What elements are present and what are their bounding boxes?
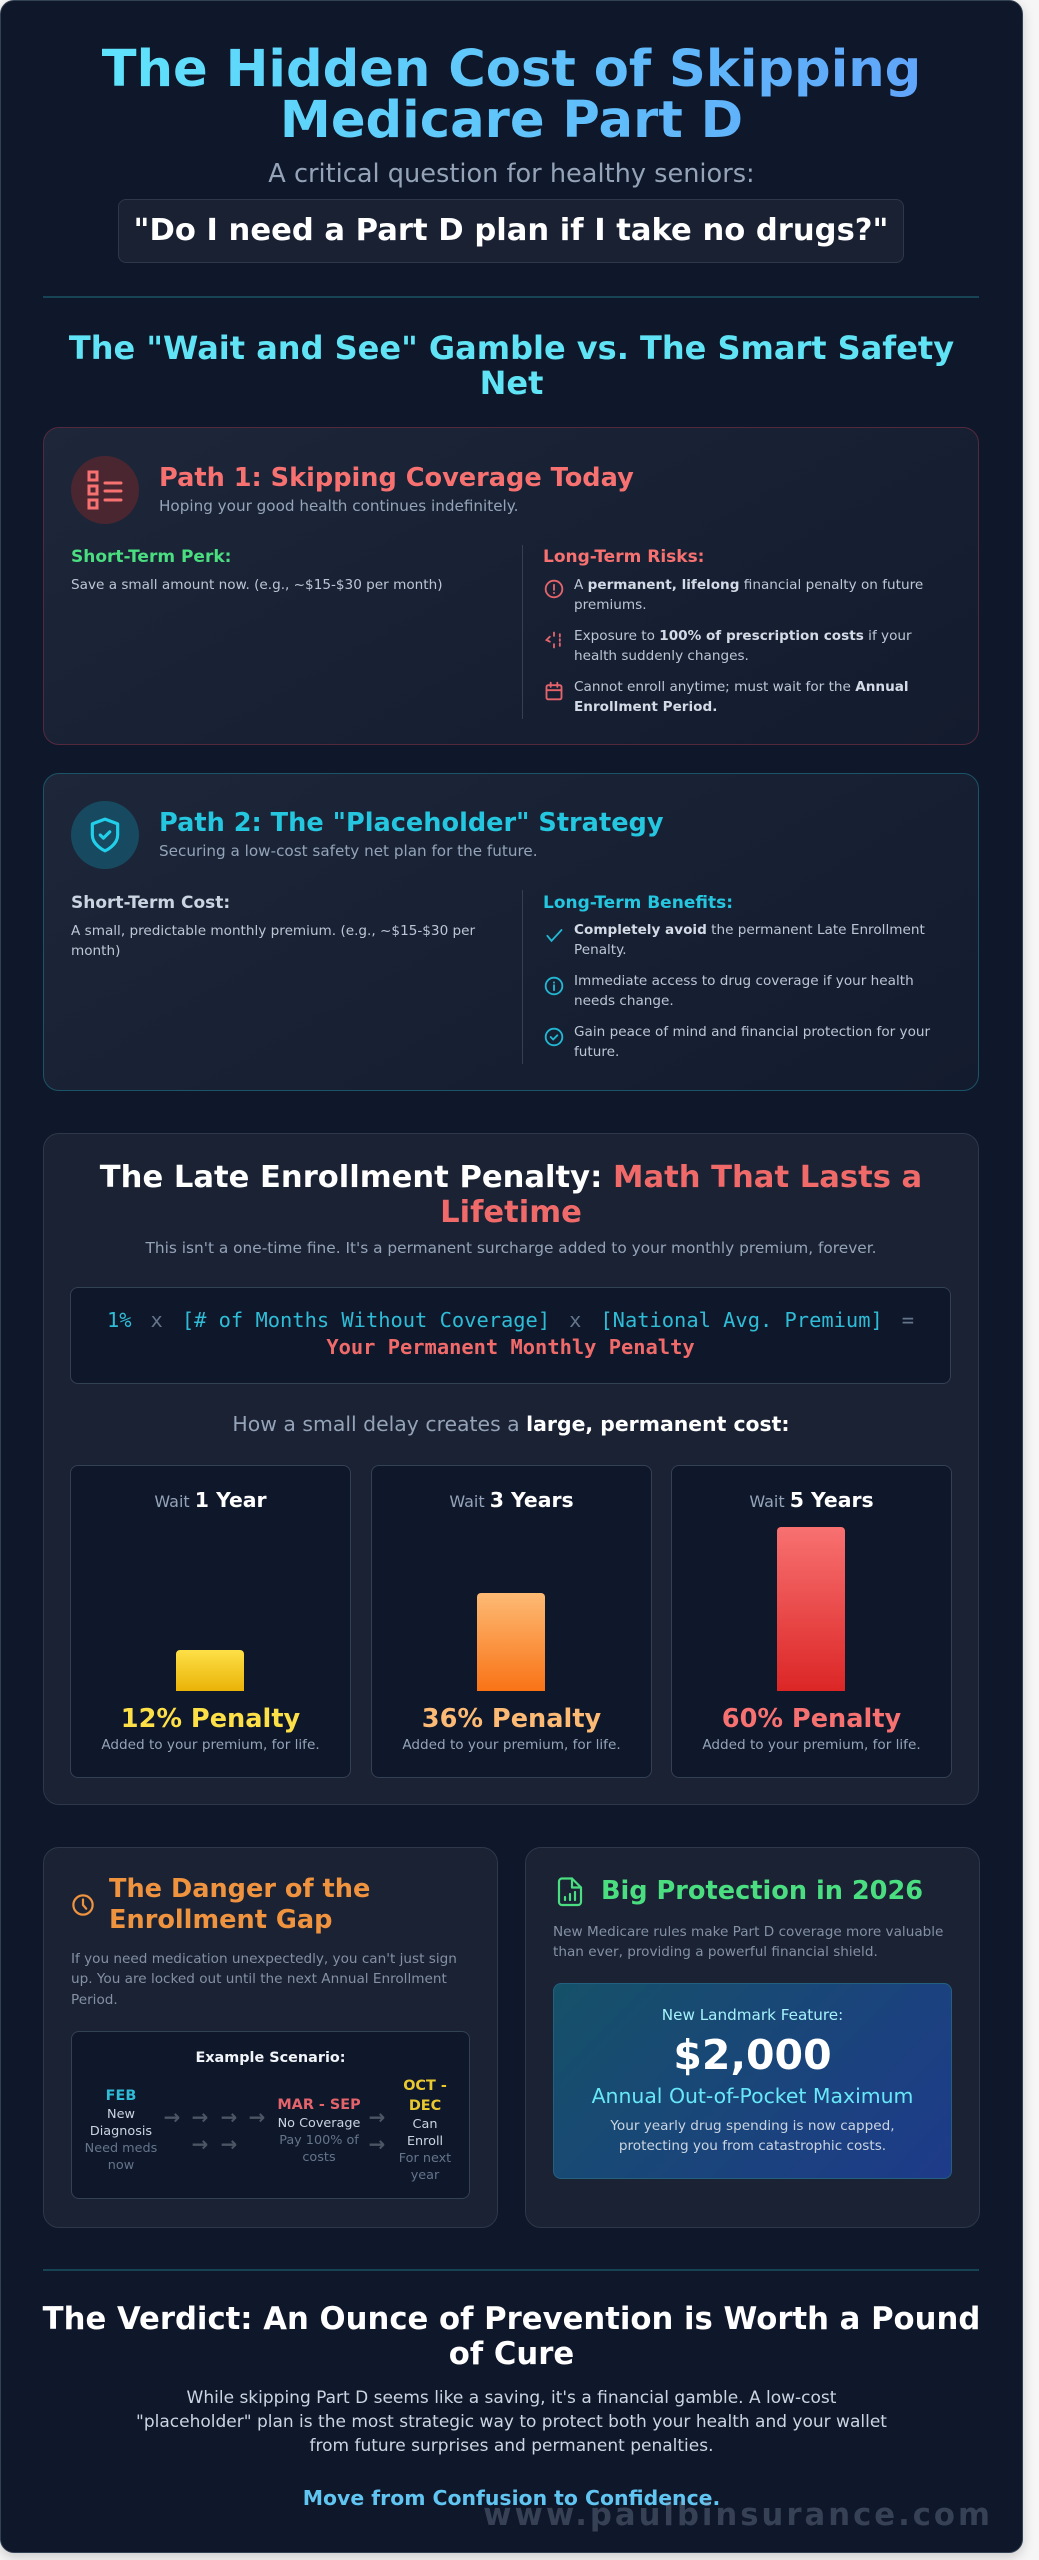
question callout: "Do I need a Part D plan if I take no drugs?" (134, 213, 888, 248)
panel: path 1 (43, 427, 979, 745)
icon: info circle (544, 976, 564, 996)
arrows to march (164, 2105, 265, 2156)
icon: calendar (546, 682, 562, 700)
formula box (70, 1287, 951, 1384)
step: october to december: Enroll (407, 2134, 443, 2149)
icon: shield check (71, 801, 139, 869)
verdict text (136, 2388, 887, 2456)
title: The Hidden Cost of Skipping (102, 39, 921, 99)
arrows to march: → (192, 2132, 208, 2156)
section heading: The "Wait and See" Gamble vs. The Smart Safety (69, 329, 954, 367)
formula: Your Permanent Monthly Penalty (326, 1335, 695, 1359)
path 1 subheading: Hoping your good health continues indefinitely. (159, 497, 518, 515)
benefit 1 text: Completely avoid the permanent Late Enrollment (574, 922, 925, 938)
risk 1 text: premiums. (574, 597, 647, 613)
step: february: Diagnosis (90, 2124, 152, 2139)
arrows to march: → (221, 2105, 237, 2129)
example scenario box (71, 2031, 470, 2199)
arrows to october (369, 2105, 385, 2156)
label: Wait 5 Years (749, 1488, 874, 1512)
big protection text: New Medicare rules make Part D coverage more valuable (553, 1924, 943, 1940)
short-term perk text: Save a small amount now. (e.g., ~$15-$30 per month) (71, 577, 442, 593)
benefit 1 text: Penalty. (574, 942, 627, 958)
big protection text: than ever, providing a powerful financial shield. (553, 1944, 878, 1960)
icon: check (546, 929, 562, 942)
callout note (610, 2118, 895, 2154)
verdict heading: The Verdict: An Ounce of Prevention is Worth a Pound (43, 2302, 980, 2337)
risk 3 text: Cannot enroll anytime; must wait for the Annual (574, 679, 909, 695)
risk 2 text: Exposure to 100% of prescription costs if your (574, 628, 912, 644)
penalty heading: Lifetime (440, 1195, 582, 1230)
step: october to december: For next (399, 2151, 451, 2166)
note: Added to your premium, for life. (402, 1737, 621, 1753)
callout note: Your yearly drug spending is now capped, (610, 2118, 895, 2134)
short-term cost text: A small, predictable monthly premium. (e.g., ~$15-$30 per (71, 923, 475, 939)
delay caption: How a small delay creates a large, permanent cost: (232, 1412, 790, 1436)
penalty heading (100, 1160, 922, 1230)
arrows to march: → (221, 2132, 237, 2156)
step: march to september (277, 2097, 361, 2165)
bar (777, 1527, 845, 1691)
step: october to december: year (411, 2168, 439, 2183)
long-term risks heading: Long-Term Risks: (543, 547, 704, 567)
step: march to september: No Coverage (278, 2116, 360, 2131)
formula: 1% x [# of Months Without Coverage] x [National Avg. Premium] = (107, 1308, 914, 1332)
section heading: Net (480, 364, 543, 402)
icon: checklist (71, 456, 139, 524)
big protection heading: Big Protection in 2026 (601, 1876, 923, 1906)
long-term benefits heading: Long-Term Benefits: (543, 893, 733, 913)
benefit 2 text: needs change. (574, 993, 674, 1009)
arrows to october: → (369, 2105, 385, 2129)
penalty heading: The Late Enrollment Penalty: Math That Lasts a (100, 1160, 922, 1195)
note: Added to your premium, for life. (101, 1737, 320, 1753)
enrollment gap heading: The Danger of the (109, 1874, 370, 1904)
icon: alert circle (544, 580, 564, 598)
risk 2 text (574, 628, 912, 664)
icon: check circle (544, 1028, 564, 1046)
question callout (118, 199, 904, 263)
amount caption: Annual Out-of-Pocket Maximum (592, 2084, 913, 2108)
verdict heading: of Cure (449, 2336, 574, 2372)
short-term cost heading: Short-Term Cost: (71, 893, 230, 913)
benefit 2 text: Immediate access to drug coverage if your health (574, 973, 914, 989)
short-term cost text (71, 923, 476, 959)
risk 1 text: A permanent, lifelong financial penalty on future (574, 577, 923, 593)
icon: clock (72, 1894, 94, 1916)
benefit 3 text: future. (574, 1044, 619, 1060)
icon: file chart (558, 1877, 582, 1906)
step: february (85, 2088, 157, 2173)
arrows to march: → (249, 2105, 265, 2129)
penalty subheading: This isn't a one-time fine. It's a permanent surcharge added to your monthly premium, forever. (145, 1239, 877, 1257)
step: march to september: MAR - SEP (277, 2097, 361, 2113)
verdict text: While skipping Part D seems like a saving, it's a financial gamble. A low-cost (187, 2388, 836, 2408)
step: october to december (399, 2078, 451, 2183)
formula (107, 1308, 914, 1359)
step: october to december: DEC (409, 2098, 441, 2114)
step: october to december: Can (413, 2117, 437, 2132)
risk 3 text (574, 679, 909, 715)
step: february: New (107, 2107, 135, 2122)
value: 36% Penalty (422, 1704, 601, 1734)
panel: late enrollment penalty (43, 1133, 979, 1805)
title (102, 39, 921, 150)
step: february: now (108, 2158, 134, 2173)
path 2 heading: Path 2: The "Placeholder" Strategy (159, 808, 664, 838)
risk 2 text: health suddenly changes. (574, 648, 749, 664)
step: february: FEB (106, 2088, 136, 2104)
enrollment gap text (71, 1951, 457, 2008)
path 2 subheading: Securing a low-cost safety net plan for the future. (159, 842, 538, 860)
card: wait 3 years (371, 1465, 652, 1778)
short-term cost text: month) (71, 943, 120, 959)
arrows to march: → (192, 2105, 208, 2129)
card: wait 1 year (70, 1465, 351, 1778)
benefit 3 text (574, 1024, 930, 1060)
arrows to october: → (369, 2132, 385, 2156)
step: march to september: Pay 100% of (279, 2133, 359, 2148)
subtitle: A critical question for healthy seniors: (268, 159, 755, 189)
enrollment gap heading (109, 1874, 370, 1935)
bar (176, 1650, 244, 1691)
section heading (69, 329, 954, 402)
benefit 2 text (574, 973, 914, 1009)
benefit 1 text (574, 922, 925, 958)
verdict text: "placeholder" plan is the most strategic way to protect both your health and your wallet (136, 2412, 887, 2432)
title: Medicare Part D (280, 90, 743, 150)
benefit 3 text: Gain peace of mind and financial protection for your (574, 1024, 930, 1040)
short-term perk heading: Short-Term Perk: (71, 547, 231, 567)
risk 1 text (574, 577, 923, 613)
icon: scattered cost (545, 632, 561, 648)
panel: path 2 (43, 773, 979, 1091)
risk 3 text: Enrollment Period. (574, 699, 717, 715)
panel: enrollment gap (43, 1847, 498, 2228)
step: march to september: costs (302, 2150, 336, 2165)
value: 60% Penalty (722, 1704, 901, 1734)
big protection text (553, 1924, 943, 1960)
enrollment gap text: Period. (71, 1992, 118, 2008)
scenario heading: Example Scenario: (195, 2050, 346, 2066)
amount: $2,000 (673, 2031, 832, 2079)
enrollment gap text: If you need medication unexpectedly, you can't just sign (71, 1951, 457, 1967)
enrollment gap text: up. You are locked out until the next Annual Enrollment (71, 1971, 447, 1987)
bar (477, 1593, 545, 1691)
verdict text: from future surprises and permanent penalties. (310, 2436, 714, 2456)
step: october to december: OCT - (403, 2078, 447, 2094)
label: Wait 3 Years (449, 1488, 574, 1512)
card: wait 5 years (671, 1465, 952, 1778)
enrollment gap heading: Enrollment Gap (109, 1905, 332, 1935)
arrows to march: → (164, 2105, 180, 2129)
step: february: Need meds (85, 2141, 157, 2156)
label: Wait 1 Year (154, 1488, 267, 1512)
feature label: New Landmark Feature: (662, 2006, 843, 2024)
call to action: Move from Confusion to Confidence. (303, 2486, 720, 2510)
path 1 heading: Path 1: Skipping Coverage Today (159, 463, 634, 493)
callout note: protecting you from catastrophic costs. (619, 2138, 886, 2154)
value: 12% Penalty (121, 1704, 300, 1734)
verdict heading (42, 2302, 980, 2372)
out-of-pocket callout (553, 1983, 952, 2179)
note: Added to your premium, for life. (702, 1737, 921, 1753)
panel: big protection (525, 1847, 980, 2228)
watermark: www.paulbinsurance.com (483, 2498, 993, 2533)
